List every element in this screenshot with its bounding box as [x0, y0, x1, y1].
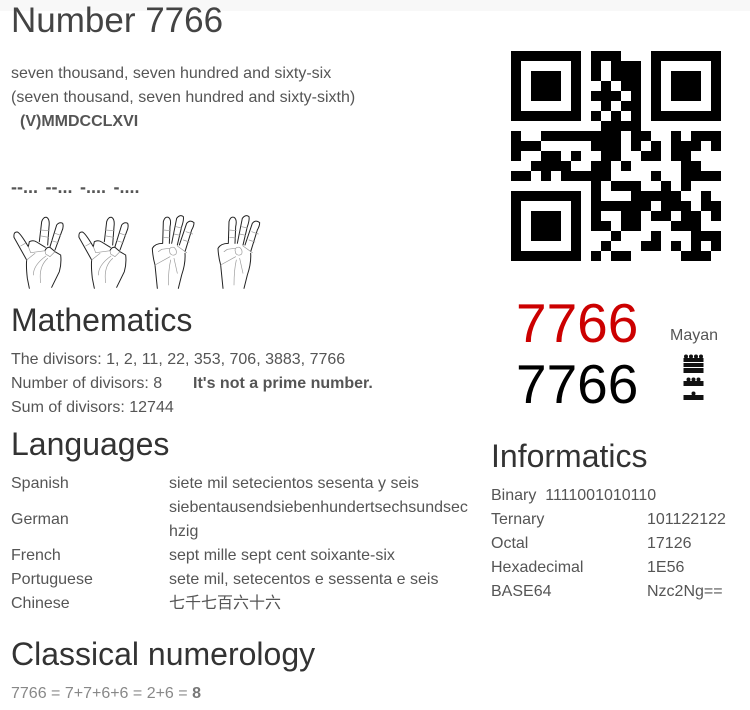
- prime note: It's not a prime number.: [193, 375, 373, 392]
- morse code: --... --... -.... -....: [11, 177, 139, 197]
- languages table: [11, 475, 468, 612]
- languages table: sete mil, setecentos e sessenta e seis: [169, 571, 438, 588]
- top band: [0, 0, 750, 11]
- BASE64: BASE64: [491, 583, 551, 600]
- divisors: The divisors: 1, 2, 11, 22, 353, 706, 3883, 7766: [11, 351, 345, 368]
- Portuguese: Portuguese: [11, 571, 93, 588]
- hand: seven: [79, 217, 128, 288]
- informatics table: Nzc2Ng==: [647, 583, 723, 600]
- large number red: 7766: [516, 292, 638, 354]
- Hexadecimal: Hexadecimal: [491, 559, 583, 576]
- Mayan label: Mayan: [670, 327, 718, 344]
- Octal: Octal: [491, 535, 528, 552]
- roman numeral: (V)MMDCCLXVI: [20, 113, 138, 130]
- Chinese: Chinese: [11, 595, 70, 612]
- informatics table: 17126: [647, 535, 692, 552]
- languages table: 七千七百六十六: [169, 595, 281, 612]
- languages table: hzig: [169, 523, 198, 540]
- numerology sum: 7766 = 7+7+6+6 = 2+6 = 8: [11, 685, 201, 702]
- heading: Languages: Languages: [11, 426, 169, 462]
- number in words: [11, 65, 355, 106]
- Ternary: Ternary: [491, 511, 544, 528]
- informatics table: [491, 487, 726, 600]
- number of divisors: Number of divisors: 8: [11, 375, 162, 392]
- informatics table: 1E56: [647, 559, 684, 576]
- icon: Mayan numeral: [684, 354, 704, 400]
- languages table: sept mille sept cent soixante-six: [169, 547, 395, 564]
- informatics table: 101122122: [647, 511, 726, 528]
- Binary: Binary 1111001010110: [491, 487, 656, 504]
- number in words: seven thousand, seven hundred and sixty-six: [11, 65, 331, 82]
- number in words: (seven thousand, seven hundred and sixty-sixth): [11, 89, 355, 106]
- large number black: 7766: [516, 353, 638, 415]
- Spanish: Spanish: [11, 475, 69, 492]
- icon: QR code: [511, 51, 721, 261]
- languages table: siete mil setecientos sesenta y seis: [169, 475, 419, 492]
- hand: six: [218, 216, 260, 288]
- languages table: siebentausendsiebenhundertsechsundsec: [169, 499, 468, 516]
- hand: seven: [14, 217, 63, 288]
- hand: six: [152, 216, 194, 288]
- heading: Classical numerology: Classical numerology: [11, 636, 315, 672]
- sum of divisors: Sum of divisors: 12744: [11, 399, 174, 416]
- icon: sign language hands: [13, 215, 260, 289]
- French: French: [11, 547, 61, 564]
- German: German: [11, 511, 69, 528]
- title: Number 7766: [11, 1, 223, 40]
- heading: Mathematics: Mathematics: [11, 302, 192, 338]
- heading: Informatics: Informatics: [491, 438, 647, 474]
